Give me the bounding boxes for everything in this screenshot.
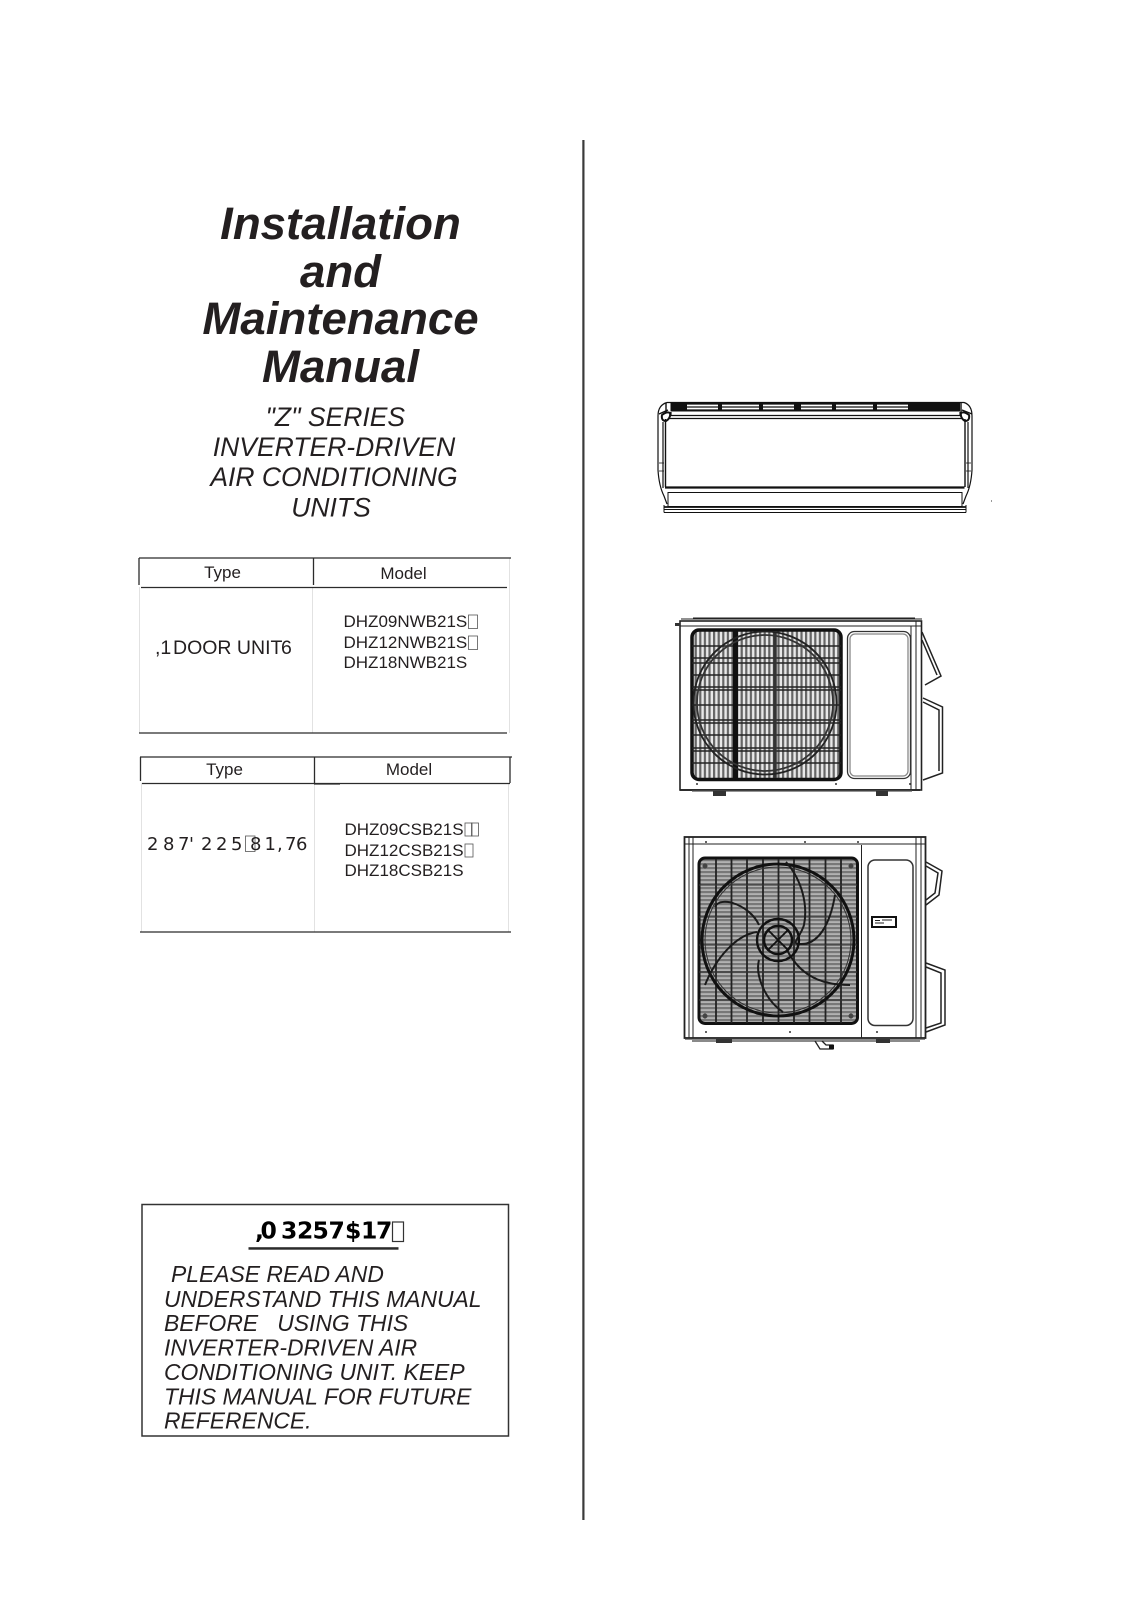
icon: outdoor unit, rear view xyxy=(675,618,942,796)
table cell: indoor models: DHZ09NWB21S xyxy=(344,612,467,631)
pipe covers xyxy=(926,862,945,1032)
callout body text: UNDERSTAND THIS MANUAL xyxy=(164,1286,482,1312)
table: indoor units xyxy=(139,558,511,733)
callout body text: THIS MANUAL FOR FUTURE xyxy=(164,1384,472,1410)
title: Maintenance xyxy=(202,293,479,344)
callout body text: PLEASE READ AND xyxy=(171,1261,384,1287)
callout body text: BEFORE USING THIS xyxy=(164,1310,409,1336)
table cell: indoor unit type: ,1 xyxy=(155,637,171,659)
table header: type: Type xyxy=(206,760,243,779)
table cell: indoor models: DHZ12NWB21S xyxy=(344,633,467,652)
vertical divider xyxy=(582,140,584,1520)
table cell: outdoor models: DHZ12CSB21S xyxy=(344,841,464,860)
title xyxy=(202,198,479,392)
table cell: outdoor models: DHZ18CSB21S xyxy=(344,861,464,880)
pipe covers xyxy=(922,632,942,780)
table cell: outdoor unit type: 81,76 xyxy=(250,834,307,855)
table header: type: Type xyxy=(204,563,241,582)
table cell: indoor models: DHZ18NWB21S xyxy=(344,653,467,672)
icon: indoor unit xyxy=(658,402,992,512)
table cell: outdoor models: DHZ09CSB21S xyxy=(344,820,464,839)
title: Installation xyxy=(220,198,461,249)
rating label xyxy=(872,917,896,927)
fan grille xyxy=(699,858,858,1024)
title: and xyxy=(300,246,382,297)
subtitle: INVERTER-DRIVEN xyxy=(213,432,456,462)
table header: model: Model xyxy=(386,760,432,779)
table cell: indoor models xyxy=(344,612,478,672)
callout body text xyxy=(164,1261,482,1434)
table: outdoor units xyxy=(140,757,512,932)
title: Manual xyxy=(262,341,420,392)
table cell: outdoor unit type xyxy=(147,834,307,855)
table cell: indoor unit type: DOOR UNIT xyxy=(173,637,282,659)
table cell: indoor unit type: 6 xyxy=(281,637,292,659)
subtitle: AIR CONDITIONING xyxy=(208,462,458,492)
callout: important notice xyxy=(142,1204,508,1436)
subtitle: "Z" SERIES xyxy=(266,402,405,432)
table cell: outdoor unit type: 287' 225 xyxy=(147,834,242,855)
fan hub xyxy=(757,919,799,961)
table cell: outdoor models xyxy=(344,820,478,880)
subtitle xyxy=(208,402,458,523)
fan grille xyxy=(692,630,841,780)
icon: outdoor unit, front view xyxy=(684,837,945,1049)
callout body text: REFERENCE. xyxy=(164,1408,312,1434)
callout heading: ,03257$17 xyxy=(255,1216,392,1244)
fan blades xyxy=(705,862,850,1012)
callout body text: CONDITIONING UNIT. KEEP xyxy=(164,1359,465,1385)
table header: model: Model xyxy=(380,564,427,583)
access panel xyxy=(848,632,910,778)
access panel xyxy=(868,860,913,1026)
subtitle: UNITS xyxy=(291,493,371,523)
callout body text: INVERTER-DRIVEN AIR xyxy=(164,1334,417,1360)
